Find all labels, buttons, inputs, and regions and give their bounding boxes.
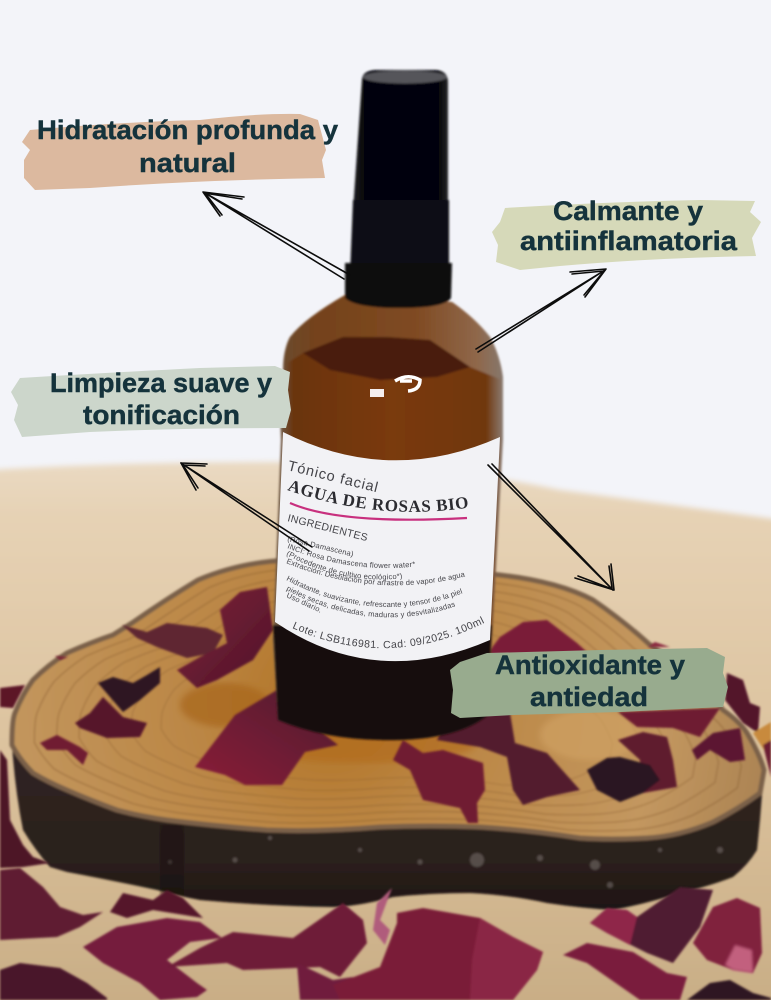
ingredients text: (Rosa Damascena) (288, 536, 353, 558)
callout: limpieza (11, 366, 291, 437)
brush banner green (450, 648, 728, 718)
callout: hidratación (22, 114, 338, 190)
product label (275, 432, 500, 661)
glass highlights (395, 377, 420, 391)
foreground petal right upper (590, 887, 713, 963)
label title: AGUA DE ROSAS BIO (287, 480, 468, 512)
banner text (37, 115, 338, 178)
foreground petal small upper (110, 890, 203, 918)
petal centre right lower (393, 740, 485, 823)
small petal far left (40, 735, 88, 765)
petal cluster: right dark (587, 732, 677, 802)
petal cluster: left curled (75, 667, 160, 738)
brush banner pale green (11, 366, 291, 437)
glass highlight small (370, 389, 384, 397)
petal left edge tall (0, 750, 50, 868)
label subtitle: Tónico facial (290, 460, 378, 492)
arrow: cleansing (181, 463, 312, 551)
small petal far left tiny (55, 656, 68, 660)
banner text: tonificación (83, 400, 240, 430)
ingredients text: Extracción: Destilación por arrastre de vapor de agua (286, 558, 466, 586)
petal behind banner top (490, 620, 587, 656)
petal far right (725, 673, 760, 733)
callout: calmante (492, 196, 761, 270)
foreground petal lower right (563, 943, 687, 1000)
brush banner sage yellow (492, 200, 761, 270)
foreground petal bottom right (687, 980, 771, 1000)
batch line: Lote: LSB116981. Cad: 09/2025. 100ml (292, 616, 484, 648)
large petal centre left (195, 690, 338, 785)
foreground petal strip (167, 903, 367, 977)
petal edge far right (763, 740, 771, 777)
small petal top right (648, 642, 670, 647)
warm centre of the slice (180, 683, 270, 727)
petal right lower dark (437, 713, 580, 805)
banner text (495, 650, 685, 712)
ingredients text: Uso diario. (287, 592, 320, 613)
wooden slice (12, 560, 764, 910)
dark base of the bottle (273, 625, 492, 740)
glass body (273, 295, 503, 740)
ingredients text: INCI: Rosa Damascena flower water* (288, 544, 415, 568)
background: beige table (0, 462, 771, 1000)
foreground petal left (0, 868, 103, 940)
petal right small (692, 728, 745, 762)
petal cluster: upper left (122, 587, 273, 688)
foreground fragment (297, 963, 353, 1000)
upper glass tone (284, 295, 502, 380)
foreground petal upright pink (373, 888, 392, 945)
spray cap (353, 70, 448, 210)
banner text (520, 196, 738, 256)
banner text: Limpieza suave y (50, 368, 272, 398)
foreground petal right (693, 898, 762, 973)
banner text: Antioxidante y (495, 650, 685, 680)
dark air gap in the bottle shoulder (303, 337, 470, 380)
banner text: natural (139, 148, 236, 178)
bottle (272, 68, 504, 742)
banner text: antiinflamatoria (520, 226, 738, 256)
label text (286, 460, 484, 648)
ingredients text: (Procedente de cultivo ecológico*) (286, 551, 402, 581)
ingredients text: Hidratante, suavizante, refrescante y tensor de la piel (286, 576, 462, 608)
rose petals on the table foreground (0, 868, 771, 1000)
arrow: calming (476, 269, 606, 352)
neck ring (345, 263, 452, 308)
foreground large petal centre (333, 908, 543, 1000)
banner text: Hidratación profunda y (37, 115, 338, 145)
banner text: antiedad (530, 682, 648, 712)
cap top (363, 70, 447, 84)
petal under right banner (618, 708, 720, 737)
top surface of the slice (12, 560, 764, 839)
arrow: antioxidant (488, 464, 614, 590)
bark side of the slice (12, 745, 764, 910)
ingredients text (286, 536, 466, 618)
pink underline (290, 503, 467, 520)
background: white wall (0, 0, 771, 540)
edge petal left of slice (0, 685, 25, 708)
growth rings (34, 569, 741, 831)
foreground petal bottom left (0, 963, 107, 1000)
banner text: Calmante y (553, 196, 703, 226)
ingredients heading: INGREDIENTES (288, 514, 368, 540)
brush banner peach (22, 114, 326, 190)
rose petals on the wood (0, 587, 771, 868)
arrow: hydration (203, 192, 350, 279)
bark specks (168, 836, 723, 888)
spray collar (350, 200, 449, 275)
banner text (50, 368, 272, 430)
orange petal far right (753, 722, 771, 757)
foreground petal pink mid (83, 918, 222, 1000)
callout: antioxidante (450, 648, 728, 718)
ingredients text: pieles secas, delicadas, maduras y desvitalizadas (286, 586, 455, 618)
